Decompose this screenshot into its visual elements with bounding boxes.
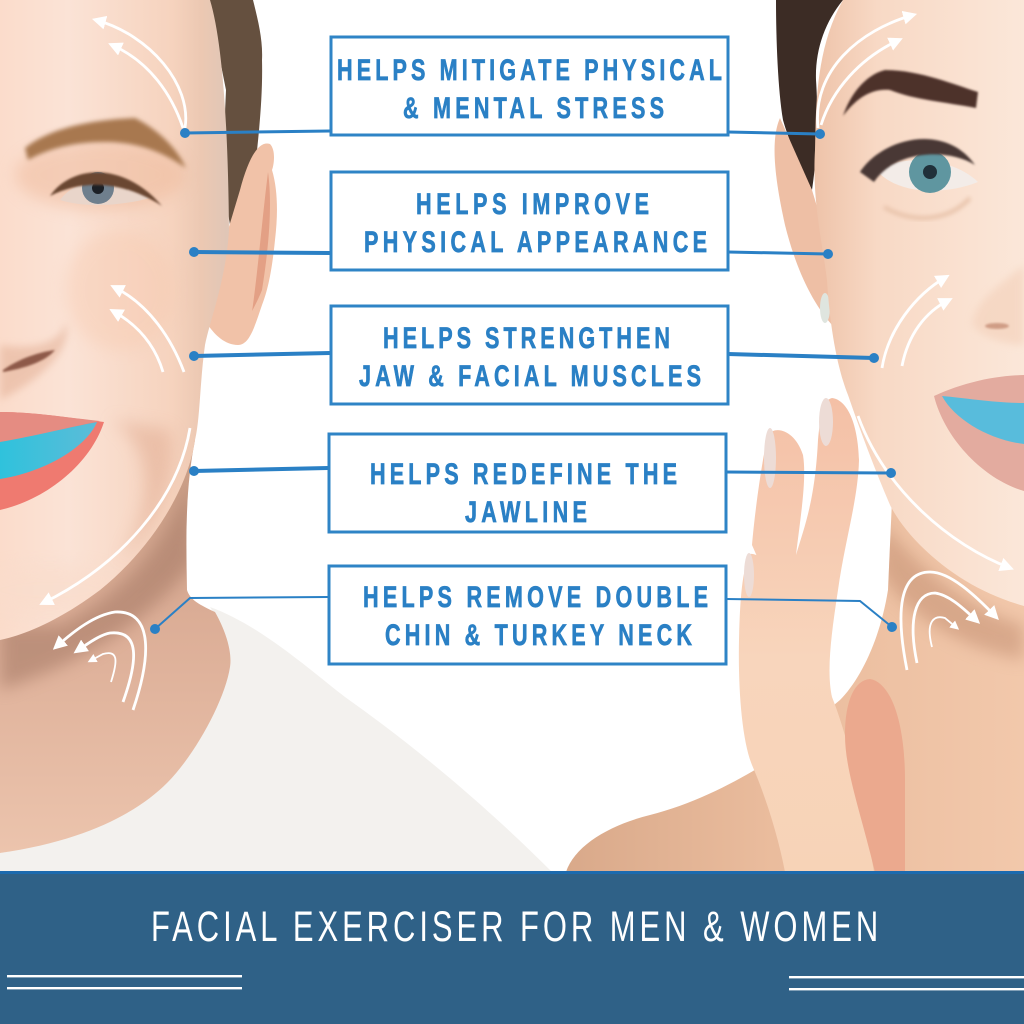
photo: woman	[566, 0, 1024, 872]
woman neck and shoulder	[566, 500, 1024, 872]
man hair	[208, 0, 262, 236]
label box 4: JAWLINE	[465, 494, 587, 529]
woman hair	[776, 0, 843, 190]
man eye	[50, 172, 162, 206]
label box 2: PHYSICAL APPEARANCE	[364, 224, 707, 259]
woman thumb	[845, 679, 905, 872]
label box 1	[331, 37, 728, 135]
man neck	[0, 440, 230, 853]
man nostril	[3, 350, 55, 372]
woman neck shadow	[880, 520, 1024, 660]
woman nose shadow	[972, 265, 1024, 345]
woman under-eye crease	[884, 198, 970, 218]
man lips	[0, 412, 104, 510]
woman nostril	[985, 323, 1009, 329]
woman hand	[739, 398, 874, 872]
connector dots: left	[150, 128, 199, 634]
man ear inner fold	[252, 172, 270, 312]
man mouthpiece	[0, 422, 97, 479]
man shirt	[0, 607, 552, 872]
man face	[0, 0, 229, 640]
label box 1: HELPS MITIGATE PHYSICAL	[337, 52, 722, 87]
label box 5: HELPS REMOVE DOUBLE	[363, 579, 708, 614]
banner rules right	[789, 976, 1024, 990]
man eyebrow	[25, 118, 186, 168]
label box 1: & MENTAL STRESS	[403, 90, 664, 125]
label box 3	[331, 306, 728, 404]
woman earring	[820, 293, 830, 323]
woman eye	[860, 139, 978, 193]
connector lines: right	[726, 132, 892, 627]
woman lips	[934, 375, 1024, 491]
label box 4	[329, 434, 726, 532]
label box 5	[329, 566, 726, 664]
label box 4: HELPS REDEFINE THE	[370, 456, 677, 491]
man neck shadow	[0, 480, 195, 690]
banner title: FACIAL EXERCISER FOR MEN & WOMEN	[151, 902, 878, 950]
man facial shading	[13, 142, 184, 548]
arrows: man	[43, 20, 190, 710]
man upper lip	[0, 412, 100, 442]
photo: man	[0, 0, 552, 872]
man ear	[208, 143, 277, 345]
banner rules left	[7, 975, 242, 989]
arrows: woman	[817, 15, 1010, 670]
woman mouthpiece	[942, 396, 1024, 444]
connector lines: left	[155, 131, 330, 629]
man nose side shading	[0, 322, 67, 400]
woman eyebrow	[843, 70, 978, 116]
label box 3: JAW & FACIAL MUSCLES	[359, 358, 701, 393]
label box 3: HELPS STRENGTHEN	[383, 320, 670, 355]
banner	[0, 871, 1024, 1024]
woman face	[814, 0, 1024, 606]
label box 2: HELPS IMPROVE	[416, 186, 649, 221]
label box 2	[331, 172, 728, 270]
connector dots: right	[815, 129, 897, 632]
woman finger nails	[744, 398, 833, 597]
label box 5: CHIN & TURKEY NECK	[385, 617, 692, 652]
woman ear	[775, 118, 832, 325]
